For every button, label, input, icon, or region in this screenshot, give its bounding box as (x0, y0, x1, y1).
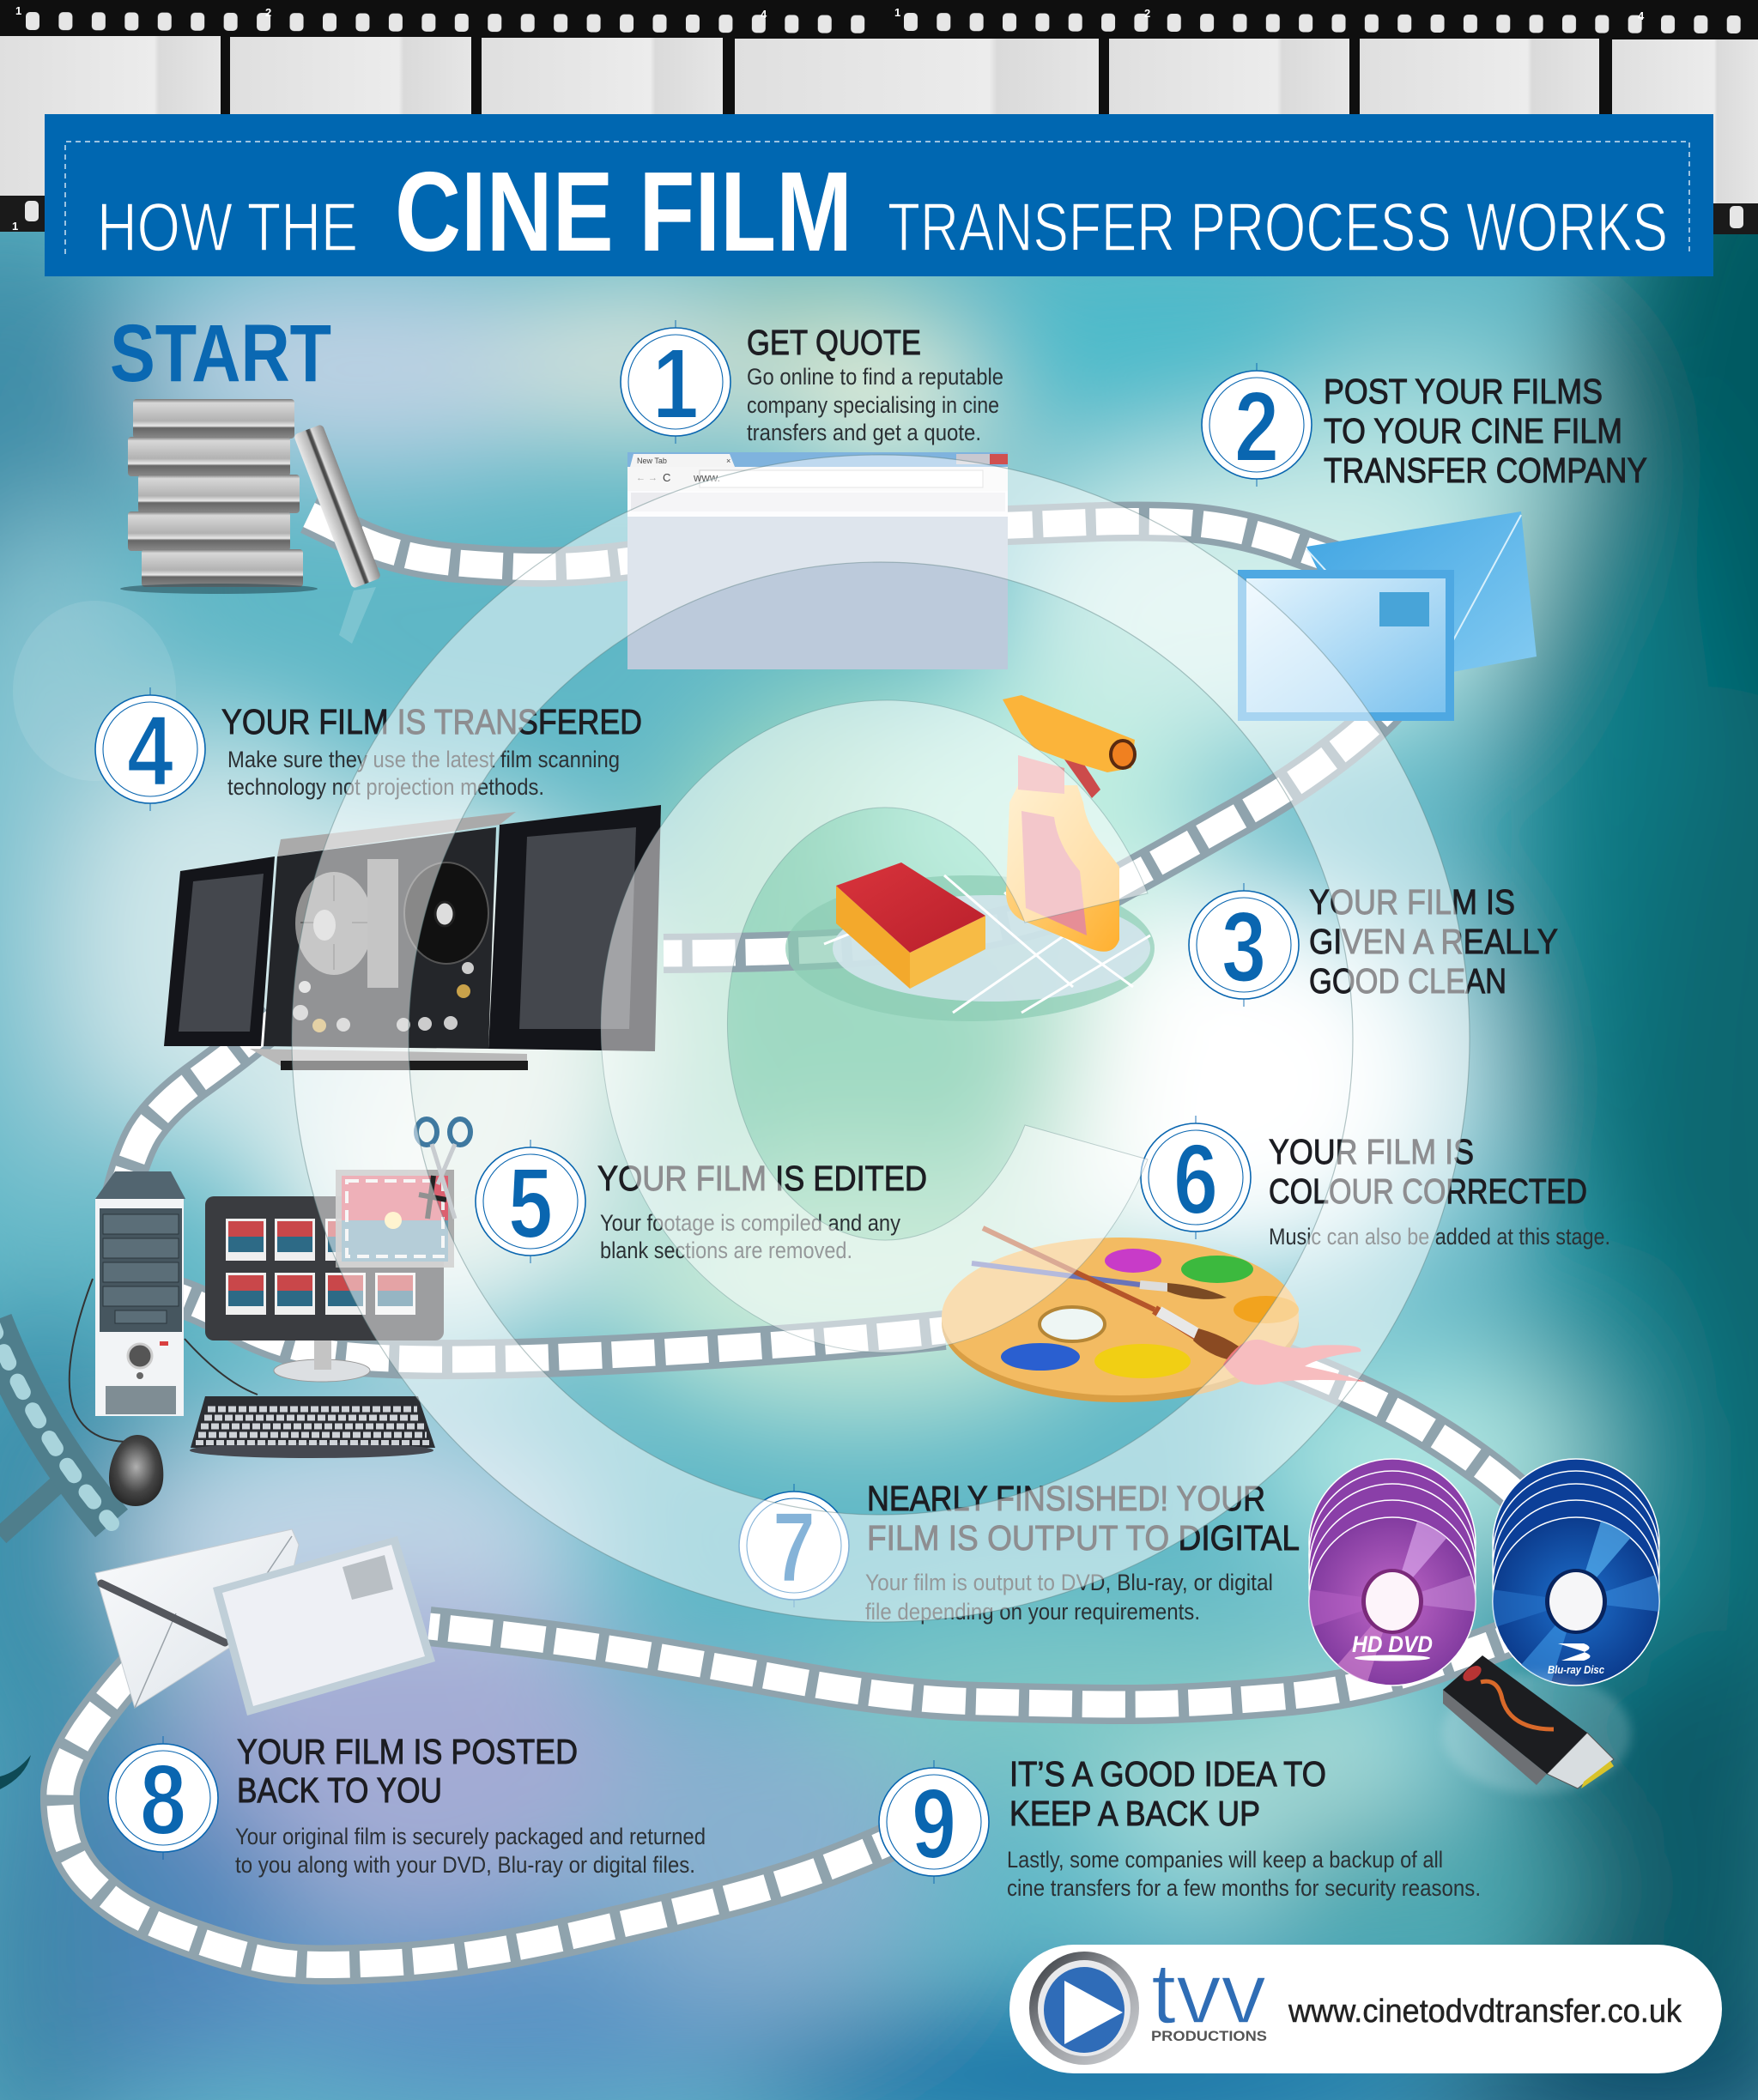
step 4 text (227, 747, 620, 800)
step 8 heading: BACK TO YOU (237, 1770, 442, 1810)
icon: browser window: www. (693, 471, 720, 484)
step 9 text (1007, 1847, 1481, 1901)
top film strip: 1 (12, 220, 18, 233)
step 5 text: Your footage is compiled and any (600, 1210, 900, 1236)
step 3 heading: YOUR FILM IS (1309, 882, 1515, 922)
step 8 heading: YOUR FILM IS POSTED (237, 1732, 578, 1771)
step 8 text: Your original film is securely packaged and returned (235, 1824, 706, 1849)
icon: computer tower (70, 1171, 258, 1442)
top film strip: 4 (1638, 9, 1645, 22)
step 6 heading: YOUR FILM IS (1269, 1132, 1474, 1171)
step 9 (879, 1754, 1481, 1901)
step 7 text (865, 1570, 1273, 1625)
step 4 text: Make sure they use the latest film scanning (227, 747, 620, 772)
step 2 badge (1202, 363, 1312, 487)
step 9 badge (879, 1760, 989, 1884)
icon: HD DVD stack (1308, 1458, 1476, 1686)
step 2 heading (1324, 372, 1647, 490)
icon: film reels (120, 399, 381, 644)
icon: browser window: C (663, 471, 670, 484)
step 7 text: Your film is output to DVD, Blu-ray, or digital (865, 1570, 1273, 1595)
step 8 text: to you along with your DVD, Blu-ray or digital files. (235, 1852, 695, 1878)
top film strip: 1 (894, 6, 900, 19)
footer pill with logo and url (1009, 1945, 1722, 2073)
step 5 text: blank sections are removed. (600, 1238, 852, 1263)
icon: browser window: ← → (636, 473, 658, 483)
step 8 heading (237, 1732, 578, 1810)
step 9 heading: IT’S A GOOD IDEA TO (1009, 1754, 1326, 1794)
step 4 (95, 687, 642, 811)
logo: productions: PRODUCTIONS (1151, 2028, 1267, 2044)
step 1 text: Go online to find a reputable (747, 364, 1003, 390)
left edge dark film reel strip (0, 1322, 112, 1789)
step 7 badge (739, 1484, 849, 1607)
step 7 heading: FILM IS OUTPUT TO DIGITAL (867, 1518, 1300, 1558)
icon: monitor with film thumbnails (205, 1170, 454, 1382)
icon: browser window (627, 452, 1008, 669)
step 1 text (747, 364, 1003, 445)
step 5 badge: 5 (508, 1147, 553, 1259)
step 8 (108, 1732, 706, 1878)
step 1 heading: GET QUOTE (747, 323, 921, 362)
step 1 text: transfers and get a quote. (747, 420, 981, 445)
top film strip: 2 (1144, 7, 1150, 20)
step 6 heading: COLOUR CORRECTED (1269, 1171, 1587, 1211)
icon: keyboard (190, 1396, 435, 1458)
step 3 (1189, 882, 1558, 1007)
icon: cleaning spray and sponge (785, 695, 1155, 1021)
step 2 heading: TO YOUR CINE FILM (1324, 411, 1622, 451)
icon: scissors (416, 1119, 470, 1219)
step 8 badge: 8 (140, 1744, 186, 1855)
step 9 heading: KEEP A BACK UP (1009, 1794, 1260, 1833)
step 3 heading: GIVEN A REALLY (1309, 922, 1558, 961)
step 3 badge: 3 (1222, 891, 1266, 1002)
title: cine film: CINE FILM (395, 148, 852, 275)
icon: white envelopes (95, 1529, 435, 1716)
step 3 heading: GOOD CLEAN (1309, 961, 1506, 1001)
top film strip: 4 (761, 8, 767, 21)
icon: Blu-ray stack: Blu-ray Disc (1548, 1663, 1605, 1676)
step 1 badge: 1 (652, 328, 699, 439)
step 9 text: Lastly, some companies will keep a backup of all (1007, 1847, 1443, 1873)
step 6 text: Music can also be added at this stage. (1269, 1224, 1610, 1250)
step 8 text (235, 1824, 706, 1878)
step 6 (1141, 1116, 1610, 1250)
top film strip: 1 (15, 4, 21, 17)
icon: Blu-ray stack (1492, 1458, 1660, 1686)
icon: artist palette (942, 1228, 1365, 1402)
step 6 heading (1269, 1132, 1587, 1211)
film ribbon (60, 515, 1576, 1965)
step 7 heading (867, 1479, 1300, 1558)
step 4 badge (95, 687, 205, 811)
start heading: START (110, 308, 331, 399)
url: www.cinetodvdtransfer.co.uk (1288, 1994, 1682, 2030)
step 1 (621, 320, 1003, 445)
top film strip: 2 (265, 6, 271, 19)
step 4 badge: 4 (127, 695, 173, 807)
icon: mouse (109, 1435, 163, 1506)
icon: film scanner (164, 805, 661, 1070)
step 4 text: technology not projection methods. (227, 774, 544, 800)
step 7 text: file depending on your requirements. (865, 1599, 1200, 1625)
icon: browser window: × (726, 457, 730, 465)
step 2 (1202, 363, 1647, 490)
title: how the: HOW THE (97, 189, 358, 265)
icon: USB stick (1442, 1655, 1631, 1794)
step 5 heading: YOUR FILM IS EDITED (597, 1159, 927, 1198)
step 8 badge (108, 1736, 218, 1860)
logo: play ring (1029, 1952, 1139, 2065)
step 7 heading: NEARLY FINSISHED! YOUR (867, 1479, 1265, 1518)
step 9 text: cine transfers for a few months for security reasons. (1007, 1875, 1481, 1901)
step 5 text (600, 1210, 900, 1263)
icon: blue envelopes (1238, 511, 1537, 721)
step 7 (739, 1479, 1300, 1625)
translucent browser logo overlay (292, 455, 1470, 1622)
step 6 badge (1141, 1116, 1251, 1239)
step 9 heading (1009, 1754, 1326, 1833)
step 3 heading (1309, 882, 1558, 1001)
step 2 heading: POST YOUR FILMS (1324, 372, 1603, 411)
step 5 badge (476, 1140, 585, 1263)
step 2 heading: TRANSFER COMPANY (1324, 451, 1647, 490)
title banner (45, 114, 1713, 276)
icon: HD DVD stack: HD DVD (1352, 1631, 1433, 1657)
icon: browser window: New Tab (637, 457, 667, 465)
step 7 badge: 7 (773, 1492, 815, 1603)
step 1 badge (621, 320, 730, 444)
step 2 badge: 2 (1234, 371, 1279, 482)
step 6 badge: 6 (1173, 1123, 1218, 1235)
step 5 (476, 1140, 927, 1263)
step 3 badge (1189, 883, 1299, 1007)
logo: tvv: tvv (1151, 1946, 1266, 2042)
step 9 badge: 9 (912, 1768, 956, 1879)
step 1 text: company specialising in cine (747, 392, 999, 418)
top film strip (0, 0, 1758, 234)
step 4 heading: YOUR FILM IS TRANSFERED (221, 702, 642, 741)
